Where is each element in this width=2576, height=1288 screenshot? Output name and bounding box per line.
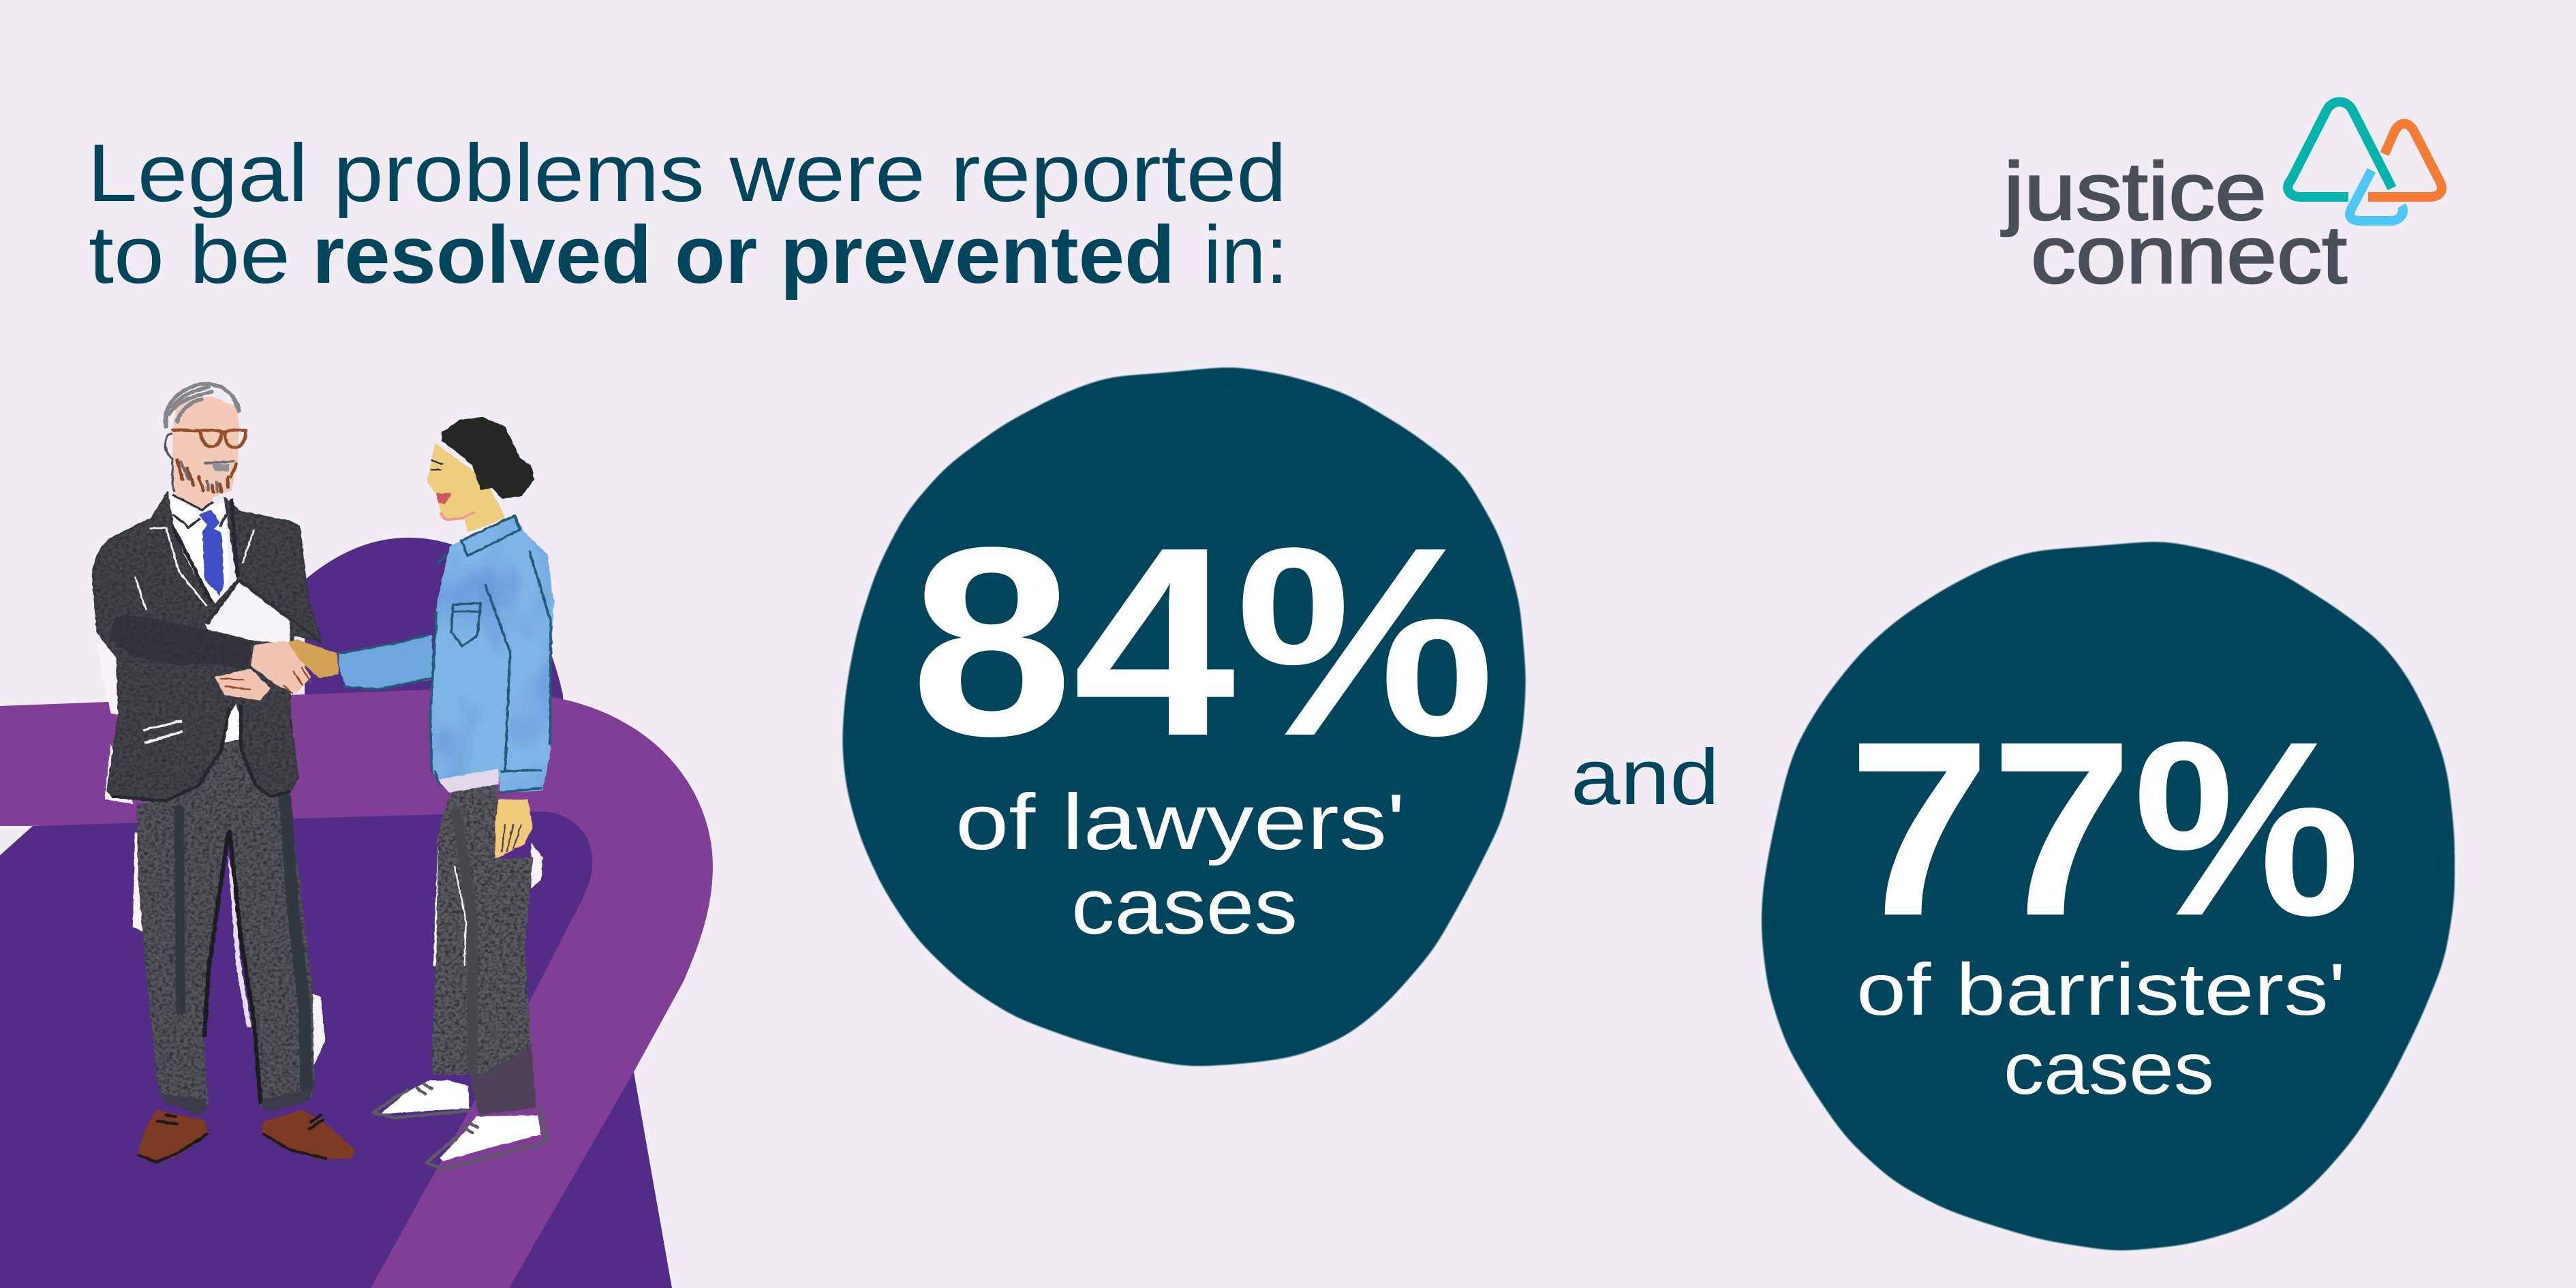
logo mark: orange triangle <box>2368 124 2442 197</box>
word: justice: justice <box>2002 146 2267 237</box>
shoe soles and laces <box>138 1115 326 1162</box>
folder edge <box>206 579 321 642</box>
hair <box>166 384 239 427</box>
shirt hem <box>437 769 499 793</box>
sleeve arm <box>339 635 433 688</box>
heading emphasis: resolved or prevented <box>312 209 1175 301</box>
logo: justice connect <box>2002 102 2442 301</box>
label: cases: cases <box>2004 1027 2214 1109</box>
beard gray <box>181 461 233 492</box>
paper halos <box>96 643 325 1064</box>
collar <box>172 495 226 527</box>
white shoes <box>381 1080 541 1161</box>
stat blob: barristers <box>1761 540 2455 1252</box>
heading line 2 start: to be <box>89 209 290 301</box>
folder <box>205 581 290 643</box>
trouser creases <box>179 809 181 1011</box>
glasses <box>172 430 246 448</box>
inner leg halo <box>228 855 251 1027</box>
eye <box>431 460 443 470</box>
heading line 1: Legal problems were reported <box>87 127 1287 219</box>
tie <box>199 510 224 596</box>
trouser cuffs <box>161 1088 311 1115</box>
woman's hand <box>277 639 339 678</box>
label: cases: cases <box>1071 862 1298 951</box>
figure: woman in blue shirt <box>215 417 554 1169</box>
dark purple floor <box>0 808 672 1288</box>
jacket <box>93 492 321 801</box>
illustration: two people shaking hands <box>93 384 554 1169</box>
paper halos <box>433 833 542 1075</box>
figure: man in suit <box>93 384 355 1163</box>
man's clasped hand <box>251 641 311 694</box>
beard <box>177 460 236 492</box>
neckline <box>440 512 475 520</box>
logo mark: teal triangle <box>2288 102 2392 197</box>
shoes <box>137 1109 355 1163</box>
ear <box>165 433 175 492</box>
label: of lawyers': of lawyers' <box>955 778 1405 866</box>
lapel highlights <box>135 528 254 610</box>
shirt lines <box>339 516 551 793</box>
shoe outlines <box>373 1084 547 1169</box>
shirt <box>171 496 230 604</box>
man's lower hand <box>215 669 271 701</box>
stat 84%: 84% <box>910 491 1495 792</box>
mouth <box>212 464 230 471</box>
stat blob: lawyers <box>842 366 1527 1067</box>
trousers <box>136 699 314 1115</box>
trousers <box>432 781 536 1115</box>
jacket lines <box>112 499 290 801</box>
neck and face <box>427 444 505 532</box>
connector word: and: and <box>1571 733 1719 821</box>
shirt tail <box>225 702 241 742</box>
shirt body <box>430 516 554 793</box>
trouser crease <box>456 810 472 1069</box>
blob shape <box>842 366 1527 1067</box>
label: of barristers': of barristers' <box>1856 948 2346 1030</box>
lips <box>436 493 451 504</box>
woman's lower hand <box>495 799 533 859</box>
stat 77%: 77% <box>1848 690 2361 968</box>
pocket <box>142 721 182 743</box>
sleeve <box>110 616 252 670</box>
blob shape <box>1761 540 2455 1252</box>
heading <box>87 127 1288 301</box>
logo mark: blue triangle <box>2350 170 2403 221</box>
dark purple hump <box>305 538 563 729</box>
light purple ribbon <box>0 690 713 1288</box>
trouser shading <box>470 1044 536 1115</box>
heading line 2 end: in: <box>1203 209 1288 301</box>
fingers <box>502 825 521 852</box>
hair <box>442 417 534 499</box>
face <box>172 396 239 513</box>
finger lines <box>220 667 311 694</box>
purple background shapes <box>0 538 713 1288</box>
word: connect: connect <box>2031 209 2347 301</box>
logo wordmark <box>2002 146 2347 301</box>
trouser edge <box>455 866 466 966</box>
